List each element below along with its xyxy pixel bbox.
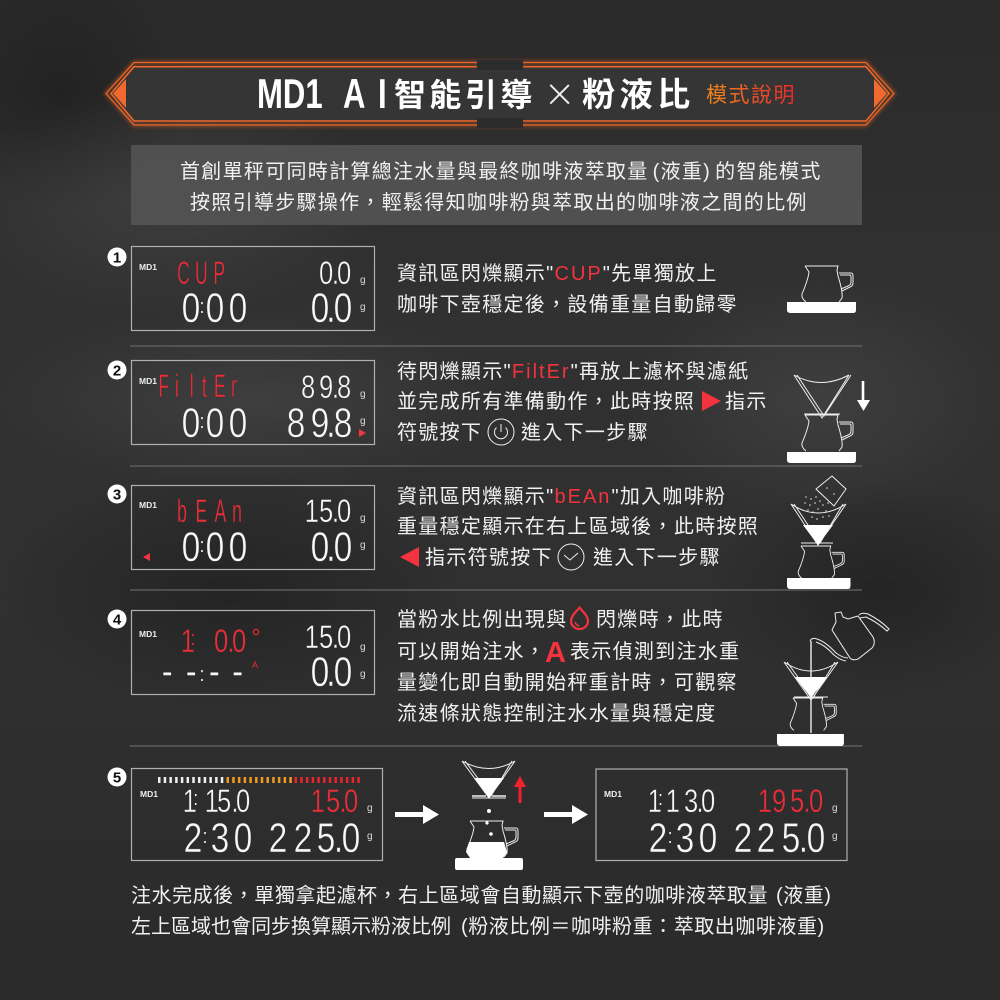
step 5 display panel after removing dripper: g [832, 803, 838, 814]
step 3 instructions: 重量穩定顯示在右上區域後，此時按照 [397, 515, 759, 538]
step 5 display panel after removing dripper: MD1 [604, 789, 622, 799]
step 3 display panel: 0 [182, 525, 200, 571]
step 1 number badge [108, 248, 126, 266]
step 2 instructions: 指示 [725, 390, 768, 413]
step 1 display panel: MD1 [139, 262, 157, 272]
step 2 display panel: FiltEr [158, 370, 237, 404]
step 3 number badge: 3 [113, 486, 121, 504]
step 4 display panel: : [200, 663, 204, 685]
closing note: 注水完成後，單獨拿起濾杯，右上區域會自動顯示下壺的咖啡液萃取量 [131, 885, 768, 907]
step 1 display panel: g [360, 302, 366, 313]
step 5 display panel before removing dripper: 15.0 [311, 784, 358, 820]
step 2 number badge [108, 360, 126, 380]
step 1 display panel: g [360, 275, 366, 286]
step 5 display panel before removing dripper: : [203, 825, 207, 847]
step 5 display panel before removing dripper: 15.0 [205, 784, 250, 820]
step 4 display panel: A [252, 660, 258, 670]
step 5 display panel before removing dripper: MD1 [140, 789, 158, 799]
step 4 display panel [132, 610, 374, 696]
closing note: 左上區域也會同步換算顯示粉液比例 [131, 915, 451, 938]
icon: adding coffee grounds [787, 476, 850, 589]
step 5 display panel after removing dripper: 195.0 [758, 784, 823, 820]
step 3 display panel: bEAn [177, 495, 242, 529]
step 1 instructions [397, 262, 738, 316]
step 1 instructions: 咖啡下壺穩定後，設備重量自動歸零 [397, 293, 738, 316]
icon: pouring water from kettle into dripper [777, 612, 889, 746]
step 1 instructions: 資訊區閃爍顯示"CUP"先單獨放上 [397, 262, 718, 285]
step 3 instructions: 資訊區閃爍顯示"bEAn"加入咖啡粉 [397, 485, 726, 508]
step 3 instructions: 指示符號按下 [425, 546, 553, 569]
step 1 number badge: 1 [113, 250, 121, 266]
step 3 display panel: g [360, 513, 366, 524]
step 4 instructions: 流速條狀態控制注水水量與穩定度 [397, 702, 716, 725]
intro text panel: 首創單秤可同時計算總注水量與最終咖啡液萃取量(液重)的智能模式 [180, 160, 822, 183]
step 3 display panel: MD1 [139, 500, 157, 510]
step 3 instructions [397, 485, 759, 570]
step 4 instructions [397, 608, 740, 725]
arrow [544, 805, 588, 824]
step 4 display panel: 0.0 [214, 624, 246, 660]
step 3 display panel: 00 [206, 525, 247, 571]
title [257, 66, 796, 122]
step 2 display panel: 00 [206, 401, 247, 447]
step 4 number badge: 4 [113, 612, 122, 628]
step 5 display panel after removing dripper: 2 [649, 816, 667, 862]
step 5 number badge: 5 [113, 770, 121, 786]
step 5 display panel after removing dripper: : [658, 787, 663, 809]
step 5 display panel after removing dripper: 225.0 [734, 816, 825, 862]
step 2 number badge: 2 [113, 362, 121, 380]
step 4 display panel: -- [162, 649, 197, 695]
step 2 instructions [397, 360, 768, 445]
step 4 display panel: -- [209, 649, 243, 695]
step 2 display panel: : [200, 410, 204, 432]
step 4 display panel: 1 [181, 624, 195, 660]
icon: lifting dripper off carafe [455, 761, 526, 870]
title banner frame [106, 60, 894, 128]
step 4 display panel: 0.0 [311, 650, 352, 696]
closing note: (粉液比例＝咖啡粉重：萃取出咖啡液重) [461, 915, 825, 938]
step 2 display panel: 89.8 [287, 401, 352, 447]
step 3 display panel: g [360, 540, 366, 551]
step 2 display panel: MD1 [139, 376, 157, 386]
step 5 display panel after removing dripper: g [832, 831, 838, 842]
step 3 number badge [108, 484, 126, 504]
step 1 display panel: 0.0 [319, 256, 351, 292]
step 5 display panel after removing dripper: 13.0 [666, 784, 715, 820]
step 3 instructions: 進入下一步驟 [593, 546, 721, 569]
step 2 display panel: 89.8 [301, 370, 351, 406]
title: MD1 AI [257, 70, 387, 117]
step 1 display panel [132, 246, 374, 332]
step 5 display panel before removing dripper: 1 [183, 784, 197, 820]
step 5 display panel before removing dripper: : [194, 787, 198, 809]
step 5 number badge [108, 768, 126, 786]
step 1 display panel: 0 [182, 286, 200, 332]
step 5 display panel after removing dripper: 1 [648, 784, 662, 820]
intro text panel: 按照引導步驟操作，輕鬆得知咖啡粉與萃取出的咖啡液之間的比例 [190, 191, 808, 214]
step 3 display panel: 15.0 [305, 494, 351, 530]
closing note [131, 883, 832, 938]
step 2 display panel: g [360, 416, 366, 427]
step 4 number badge [108, 610, 126, 628]
step 1 display panel: CUP [177, 257, 225, 291]
step 5 display panel after removing dripper: 30 [676, 816, 717, 862]
step 2 display panel: 0 [182, 401, 200, 447]
step 2 display panel: g [360, 389, 366, 400]
title: × [545, 66, 574, 122]
step 5 display panel after removing dripper: : [668, 825, 672, 847]
step 4 display panel: g [360, 642, 366, 653]
step 4 instructions: 可以開始注水， [397, 640, 546, 663]
step 2 instructions: 進入下一步驟 [521, 421, 649, 444]
step 4 display panel: g [360, 669, 366, 680]
closing note: (液重) [776, 884, 832, 907]
step 5 display panel before removing dripper: 30 [211, 816, 252, 862]
step 2 display panel [132, 360, 374, 447]
icon: carafe on scale [787, 266, 856, 313]
step 5 display panel after removing dripper [596, 769, 847, 862]
step 2 instructions: 符號按下 [397, 421, 482, 444]
step 1 display panel: : [200, 295, 204, 317]
step 2 instructions: 並完成所有準備動作，此時按照 [397, 390, 695, 413]
step 4 instructions: 量變化即自動開始秤重計時，可觀察 [397, 671, 738, 694]
step 5 display panel before removing dripper: g [367, 831, 373, 842]
step 4 display panel: 15.0 [305, 620, 351, 656]
step 4 instructions: A [545, 637, 566, 669]
step 1 display panel: 00 [206, 286, 247, 332]
step 5 display panel before removing dripper: 2 [184, 816, 202, 862]
step 4 instructions: 表示偵測到注水重 [570, 640, 740, 663]
step 3 display panel: : [200, 534, 204, 556]
title: 模式說明 [706, 84, 796, 107]
step 3 display panel: 0.0 [311, 525, 352, 571]
title: 智能引導 [394, 77, 536, 113]
title: 粉液比 [582, 76, 695, 113]
step 4 display panel: : [190, 627, 195, 649]
step 1 display panel: 0.0 [311, 286, 352, 332]
step 4 display panel: MD1 [139, 629, 157, 639]
flow rate bar [158, 777, 360, 783]
step 5 display panel before removing dripper: 225.0 [269, 816, 360, 862]
step 5 display panel before removing dripper [132, 768, 382, 862]
step 5 display panel before removing dripper: g [367, 803, 373, 814]
step 3 display panel [132, 486, 374, 571]
intro text panel [131, 145, 862, 225]
icon: dripper lowered onto carafe [787, 375, 870, 463]
arrow [395, 805, 439, 824]
step 4 instructions: 閃爍時，此時 [596, 608, 724, 631]
step 2 instructions: 待閃爍顯示"FiltEr"再放上濾杯與濾紙 [397, 360, 749, 383]
step 4 instructions: 當粉水比例出現與 [397, 608, 567, 631]
